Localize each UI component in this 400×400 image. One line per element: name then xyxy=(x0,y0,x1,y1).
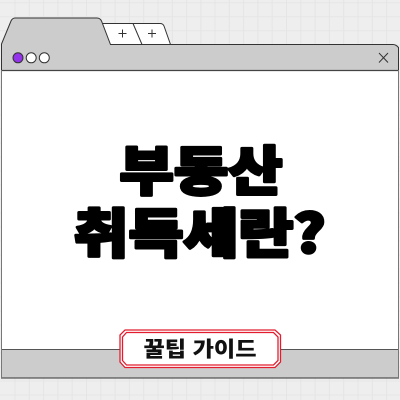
title line 1: 부동산 xyxy=(120,130,282,206)
badge label: 꿀팁 가이드 xyxy=(144,334,256,364)
icon: second plus xyxy=(148,30,156,38)
title line 2: 취득세란? xyxy=(74,192,326,268)
header divider xyxy=(2,70,398,72)
badge: tip guide xyxy=(120,330,280,368)
content area xyxy=(2,70,398,350)
inactive tabs xyxy=(102,24,170,44)
badge outer frame xyxy=(120,330,280,368)
window side edges xyxy=(2,70,398,378)
icon: plus xyxy=(118,30,126,38)
badge inner frame xyxy=(122,332,278,365)
footer divider xyxy=(2,348,398,350)
window controls xyxy=(13,53,49,63)
title xyxy=(74,130,326,268)
icon: close xyxy=(379,53,388,62)
